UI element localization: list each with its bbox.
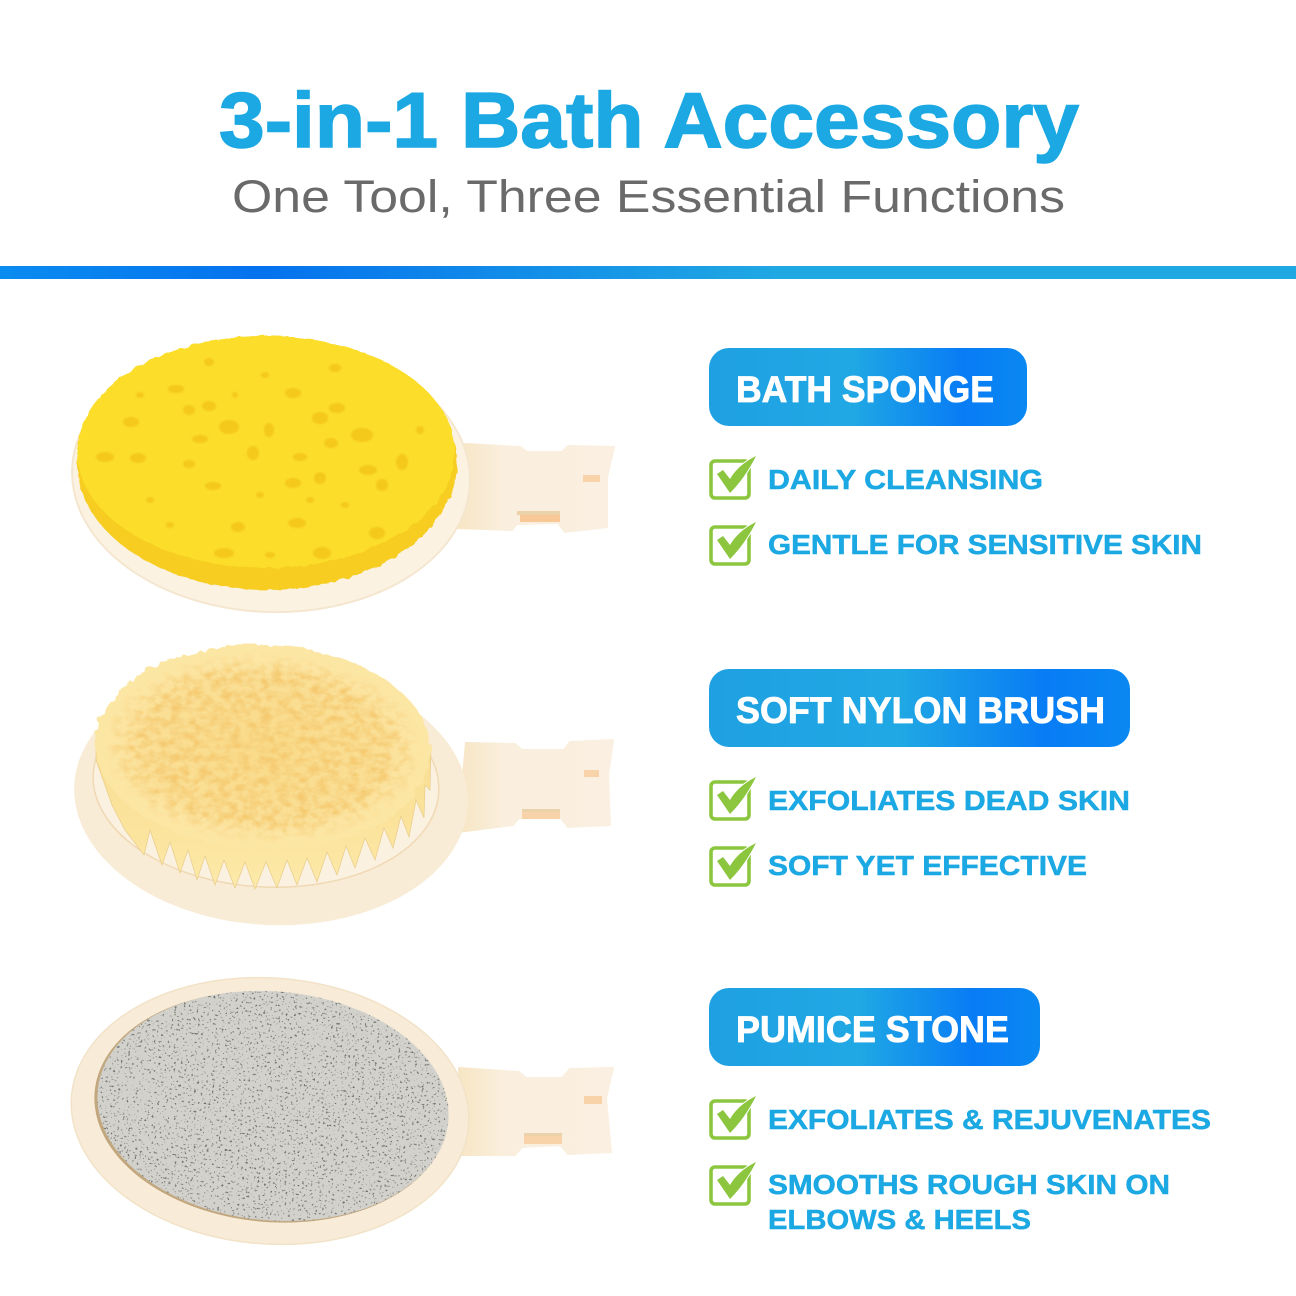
sponge handle connector	[457, 444, 614, 532]
section: bath sponge	[709, 348, 1202, 564]
section: pumice stone	[709, 988, 1211, 1235]
sponge body	[77, 336, 457, 590]
benefit: smooths rough skin: SMOOTHS ROUGH SKIN ON	[768, 1169, 1170, 1200]
brush tray	[67, 655, 475, 935]
pumice handle connector	[459, 1068, 613, 1155]
benefit: exfoliates and rejuvenates: EXFOLIATES & REJUVENATES	[768, 1104, 1211, 1135]
section: soft nylon brush	[709, 669, 1130, 885]
subtitle: One Tool, Three Essential Functions	[232, 171, 1065, 222]
badge: bath sponge: BATH SPONGE	[736, 369, 994, 410]
header divider bar	[0, 266, 1296, 279]
benefit: exfoliates dead skin: EXFOLIATES DEAD SKIN	[768, 785, 1130, 816]
icon: check	[711, 456, 756, 498]
pumice stone	[88, 977, 458, 1235]
benefit: soft yet effective: SOFT YET EFFECTIVE	[768, 850, 1087, 881]
badge: pumice stone	[709, 988, 1040, 1066]
icon: check	[711, 1162, 756, 1204]
title: 3-in-1 Bath Accessory	[219, 76, 1079, 164]
icon: check	[711, 1096, 756, 1138]
icon: check	[711, 522, 756, 564]
badge: pumice stone: PUMICE STONE	[736, 1009, 1009, 1050]
pumice tray	[62, 964, 478, 1258]
product image: soft nylon brush head	[67, 639, 613, 935]
sponge tray	[67, 333, 475, 619]
product image: bath sponge head	[67, 333, 614, 619]
badge: bath sponge	[709, 348, 1027, 426]
icon: check	[711, 843, 756, 885]
brush bristles	[92, 639, 434, 889]
benefit: smooths rough skin	[768, 1169, 1170, 1235]
badge: soft nylon brush	[709, 669, 1130, 747]
benefit: gentle: GENTLE FOR SENSITIVE SKIN	[768, 529, 1202, 560]
product image: pumice stone head	[62, 964, 613, 1258]
icon: check	[711, 777, 756, 819]
badge: soft nylon brush: SOFT NYLON BRUSH	[736, 690, 1105, 731]
benefit: smooths rough skin: ELBOWS & HEELS	[768, 1204, 1031, 1235]
brush handle connector	[458, 740, 613, 832]
benefit: daily cleansing: DAILY CLEANSING	[768, 464, 1043, 495]
brush inner plate	[88, 670, 444, 896]
pumice underside edge	[85, 977, 457, 1237]
